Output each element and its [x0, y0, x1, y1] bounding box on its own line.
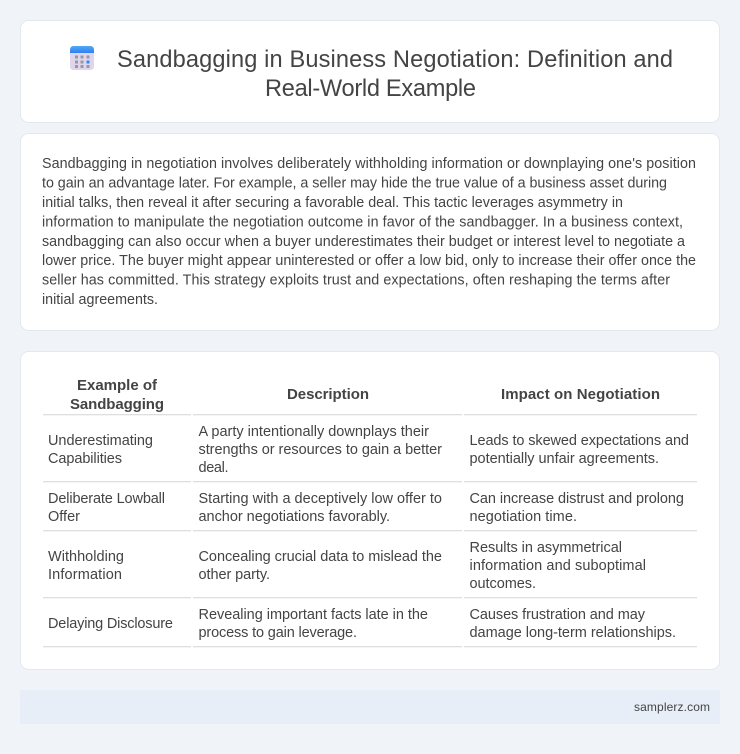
table row: withholding information [48, 540, 646, 592]
table row: deliberate lowball offer: negotiation time. [470, 509, 577, 525]
icon: calendar [70, 46, 94, 70]
table header: Impact on Negotiation [501, 386, 660, 403]
table row: withholding information: Withholding [48, 549, 124, 565]
table row: underestimating capabilities: Leads to skewed expectations and [470, 433, 689, 449]
table row: deliberate lowball offer [48, 491, 684, 525]
table row: deliberate lowball offer: Can increase distrust and prolong [470, 491, 684, 507]
text block: definition: Sandbagging in negotiation involves deliberately withholding information or downplaying one's position [42, 156, 696, 172]
table row: underestimating capabilities [48, 424, 689, 476]
table row: deliberate lowball offer: Deliberate Lowball [48, 491, 165, 507]
table row: deliberate lowball offer: anchor negotiations favorably. [198, 509, 390, 525]
table row: delaying disclosure [48, 607, 676, 641]
panel: definition paragraph [20, 134, 720, 330]
panel: title card [20, 20, 720, 122]
table row: underestimating capabilities: Capabilities [48, 451, 122, 467]
title [117, 47, 673, 102]
table row: underestimating capabilities: A party intentionally downplays their [198, 424, 429, 440]
text block: definition [42, 156, 696, 308]
text block: definition: lower price. The buyer might appear uninterested or offer a low bid, only to increase their offer once the [42, 253, 696, 269]
table row: delaying disclosure: Revealing important facts late in the [198, 607, 428, 623]
text block: definition: initial talks, then reveal it after securing a favorable deal. This tactic leverages asymmetry in [42, 195, 623, 211]
text block: definition: sandbagging can also occur when a buyer underestimates their budget or interest level to negotiate a [42, 234, 685, 250]
table header: Description [287, 386, 369, 403]
text block: definition: seller has committed. This strategy exploits trust and expectations, often reshaping the terms after [42, 272, 670, 288]
title: Real-World Example [265, 76, 476, 102]
table row: withholding information: Information [48, 567, 122, 583]
table header: Example of [77, 377, 158, 394]
title: Sandbagging in Business Negotiation: Definition and [117, 47, 673, 73]
table row: underestimating capabilities: potentially unfair agreements. [470, 451, 659, 467]
text block: definition: information to manipulate the negotiation outcome in favor of the sandbagger. In a business context, [42, 214, 683, 230]
text block: definition: initial agreements. [42, 292, 158, 308]
text block: definition: to gain an advantage later. For example, a seller may hide the true value of a business asset during [42, 176, 667, 192]
table row: delaying disclosure: Causes frustration and may [470, 607, 646, 623]
table header [70, 377, 660, 413]
table row: delaying disclosure: Delaying Disclosure [48, 616, 173, 632]
table row: withholding information: Concealing crucial data to mislead the [198, 549, 442, 565]
table header: Sandbagging [70, 396, 164, 413]
table row: underestimating capabilities: strengths or resources to gain a better [198, 442, 442, 458]
footer bar [20, 690, 720, 724]
table row: withholding information: other party. [198, 567, 270, 583]
table row: withholding information: outcomes. [470, 576, 536, 592]
table row: withholding information: information and suboptimal [470, 558, 646, 574]
table row: deliberate lowball offer: Offer [48, 509, 80, 525]
footer source text: samplerz.com [634, 700, 710, 714]
table row: deliberate lowball offer: Starting with a deceptively low offer to [198, 491, 442, 507]
panel: examples table [20, 352, 720, 670]
table row: delaying disclosure: process to gain leverage. [198, 625, 357, 641]
table row: delaying disclosure: damage long-term relationships. [470, 625, 676, 641]
table row: underestimating capabilities: deal. [198, 460, 228, 476]
table row: withholding information: Results in asymmetrical [470, 540, 622, 556]
table row: underestimating capabilities: Underestimating [48, 433, 153, 449]
